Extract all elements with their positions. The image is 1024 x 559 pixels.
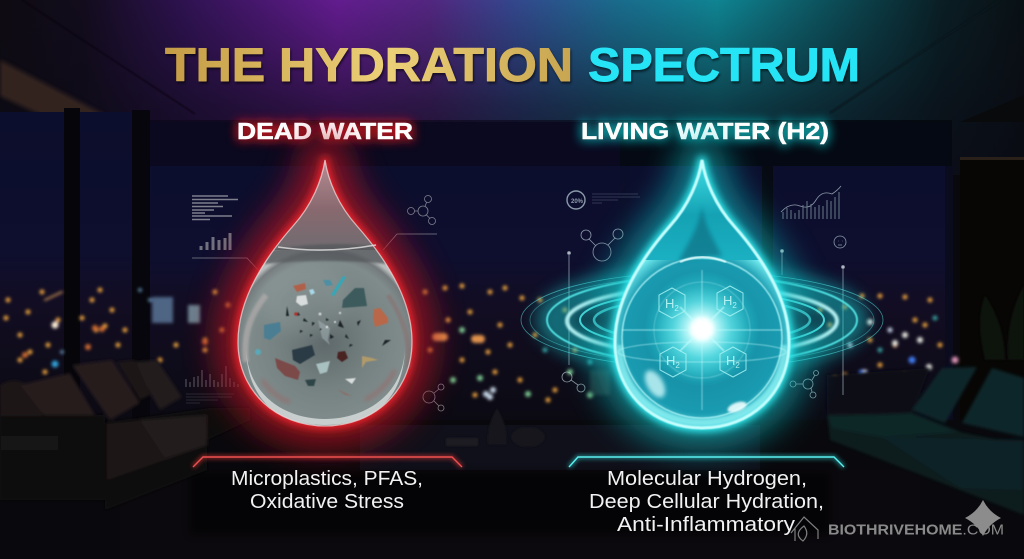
left sofa [0,360,250,510]
heading: living water: LIVING WATER (H2) [581,118,829,144]
cyan drop [615,160,789,428]
microplastic particles [255,276,391,396]
heading: dead water: DEAD WATER [237,118,413,144]
red bracket line [193,457,462,467]
cyan drop: 2 [735,361,740,370]
caption: dead water: Microplastics, PFAS, [231,468,423,490]
plant [980,285,1024,360]
title: THE HYDRATION [166,40,574,93]
caption: dead water: Oxidative Stress [250,491,404,513]
table with vase [446,408,545,447]
cyan bracket line [569,457,844,467]
caption: living water: Molecular Hydrogen, [607,468,807,490]
cyan halo [615,160,789,428]
H2 hexagons [659,286,746,377]
HUD decorations: living water: 20% [571,199,584,205]
cyan drop: H [723,293,732,308]
title [165,38,861,93]
HUD decorations: dead water [186,196,444,411]
cyan drop: 2 [732,301,737,310]
title: SPECTRUM [589,40,861,93]
caption: living water [589,468,824,536]
caption: dead water [231,468,423,513]
title: THE HYDRATION [165,38,573,91]
cyan drop: 2 [674,304,679,313]
red halo [238,160,412,426]
heading: dead water: DEAD WATER [237,118,413,144]
HUD decorations: living water [562,186,846,398]
cyan drop: H [666,353,675,368]
watermark: biothrivehome.com: BIOTHRIVEHOME .COM [828,522,1004,538]
watermark: biothrivehome.com [791,500,1004,541]
cyan drop: H [665,296,674,311]
city lights [6,286,955,400]
cyan drop: 2 [675,361,680,370]
right sofa [827,367,1024,515]
cyan drop: H [726,353,735,368]
core flare [644,271,760,387]
heading: living water: LIVING WATER (H2) [581,118,829,144]
energy rings [521,272,883,368]
caption: living water: Deep Cellular Hydration, [589,491,824,513]
caption: living water: Anti-Inflammatory [617,514,795,536]
title: SPECTRUM [588,38,860,91]
red drop [238,160,412,426]
